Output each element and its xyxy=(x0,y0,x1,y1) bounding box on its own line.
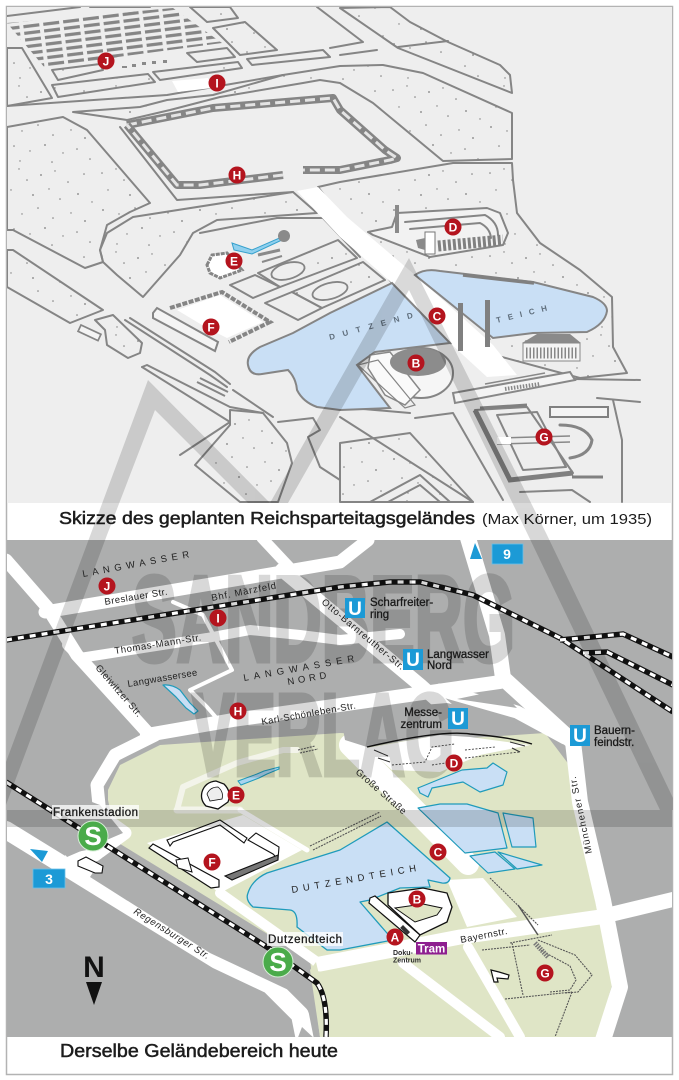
street and area labels: Große Straße xyxy=(353,767,409,817)
S-Bahn Frankenstadion: Frankenstadion xyxy=(53,807,138,819)
March field G xyxy=(475,405,608,480)
markers: map: I xyxy=(216,612,220,626)
markers: map: A xyxy=(391,930,400,944)
street and area labels xyxy=(82,549,595,962)
station: Bauernfeindstr: Bauern- xyxy=(594,725,635,737)
long hall south of avenue xyxy=(453,372,575,403)
Doku-Zentrum label: Zentrum xyxy=(393,958,421,964)
street and area labels: LANGWASSER xyxy=(82,549,194,580)
markers: sketch: D xyxy=(449,220,458,234)
road lines xyxy=(7,7,640,502)
avenue end block xyxy=(447,878,517,927)
G stand xyxy=(491,905,548,982)
street and area labels: Breslauer Str. xyxy=(104,587,169,608)
park area xyxy=(108,733,612,1037)
markers: sketch: I xyxy=(215,76,219,90)
station: Scharfreiter-ring: Scharfreiter- xyxy=(370,597,433,609)
markers: map: F xyxy=(208,856,216,870)
station: Langwasser Nord: U xyxy=(406,650,420,671)
stadium E xyxy=(202,767,279,809)
Building east of lake xyxy=(522,334,581,361)
stippled blocks north xyxy=(7,7,627,502)
markers: map xyxy=(98,578,554,982)
lake label: DUTZEND xyxy=(328,309,422,342)
street and area labels: Karl-Schönleben-Str. xyxy=(261,700,357,728)
street and area labels: Langwassersee xyxy=(127,667,199,690)
grand avenue xyxy=(297,187,517,377)
street and area labels: Bhf. Märzfeld xyxy=(210,581,277,604)
grey strips xyxy=(66,694,517,1037)
north arrow: N xyxy=(83,951,105,984)
station: Bauernfeindstr: feindstr. xyxy=(594,737,634,749)
tram label: Tram xyxy=(418,944,445,956)
S-Bahn Dutzendteich: S xyxy=(269,947,287,977)
markers: map: E xyxy=(232,788,240,802)
motorway badge 9: 9 xyxy=(503,546,511,562)
station: Scharfreiter-ring: U xyxy=(348,599,362,620)
street and area labels: Thomas-Mann-Str. xyxy=(114,632,202,657)
markers: sketch: G xyxy=(539,430,549,444)
station: Messezentrum: Messe- xyxy=(404,707,442,719)
markers: sketch: F xyxy=(207,320,215,334)
Dutzendteich lake xyxy=(248,270,607,410)
caption: sketch xyxy=(59,508,652,528)
caption: sketch: (Max Körner, um 1935) xyxy=(482,512,652,528)
Zeppelin field F xyxy=(78,292,270,396)
street and area labels: NORD xyxy=(287,670,331,688)
markers: map: H xyxy=(234,704,242,718)
white patch at caption road xyxy=(172,78,212,92)
markers: map: C xyxy=(434,846,443,860)
motorway badge 9 xyxy=(470,543,523,564)
north arrow xyxy=(83,951,105,1005)
markers: sketch: B xyxy=(412,356,421,370)
lake label 2: TEICH xyxy=(495,302,555,325)
roads xyxy=(6,538,675,1040)
street and area labels: LANGWASSER xyxy=(243,653,359,684)
Stadium E xyxy=(207,230,290,278)
station: Bauernfeindstr xyxy=(570,725,635,749)
Dutzendteich lake xyxy=(247,822,450,950)
street and area labels: DUTZENDTEICH xyxy=(291,863,421,896)
markers: sketch: E xyxy=(230,254,238,268)
small plots xyxy=(230,240,385,320)
markers: sketch xyxy=(98,52,552,446)
Congress hall D xyxy=(368,205,508,257)
caption: sketch: Skizze des geplanten Reichsparteitagsgeländes xyxy=(59,508,475,528)
F field white block xyxy=(147,815,302,893)
markers: map: G xyxy=(540,966,550,980)
Arena B xyxy=(358,348,453,408)
markers: sketch: C xyxy=(433,310,442,324)
S-Bahn Dutzendteich xyxy=(263,932,343,977)
station: Langwasser Nord: Langwasser xyxy=(427,649,489,661)
Zeppelin tribunes F xyxy=(149,820,279,888)
S-Bahn Dutzendteich: Dutzendteich xyxy=(268,934,342,946)
horseshoe B and Doku-Zentrum xyxy=(369,888,452,942)
ponds xyxy=(163,685,542,873)
railway xyxy=(6,582,673,1037)
Doku-Zentrum label xyxy=(393,950,421,964)
station: Scharfreiter-ring: ring xyxy=(370,609,389,621)
street and area labels: Otto-Barnreuther-Str. xyxy=(319,597,407,673)
station: Langwasser Nord: Nord xyxy=(427,660,452,672)
S-Bahn Frankenstadion: S xyxy=(84,821,102,851)
Doku-Zentrum label: Doku- xyxy=(393,950,414,957)
caption: today: Derselbe Geländebereich heute xyxy=(60,1041,338,1061)
S-Bahn Frankenstadion xyxy=(52,805,139,851)
motorway badge 3: 3 xyxy=(45,871,53,887)
S station small building xyxy=(78,857,103,873)
station: Messezentrum xyxy=(400,707,468,731)
station: Messezentrum: zentrum xyxy=(400,719,442,731)
street and area labels: Gleiwitzer Str. xyxy=(93,663,144,720)
markers: map: J xyxy=(104,580,110,594)
street and area labels: Regensburger Str. xyxy=(131,906,212,962)
panel: today's map xyxy=(6,538,675,1040)
obelisks xyxy=(458,300,490,351)
motorway badge 3 xyxy=(30,849,65,888)
dotted paths xyxy=(298,746,592,1037)
markers: sketch: H xyxy=(233,168,241,182)
street and area labels: Bayernstr. xyxy=(459,926,509,946)
camp grid J xyxy=(7,7,222,68)
J bars small marks xyxy=(122,60,167,68)
arena H xyxy=(127,98,397,185)
markers: sketch: J xyxy=(103,54,109,68)
station: Scharfreiter-ring xyxy=(345,597,433,621)
watermark triangle and lettering xyxy=(6,258,673,827)
markers: map: D xyxy=(450,756,459,770)
Congress hall site D xyxy=(367,733,532,772)
watermark triangle and lettering: VERLAG xyxy=(192,670,454,800)
street and area labels: Münchener Str. xyxy=(568,775,595,855)
panel: planned site sketch xyxy=(7,7,672,503)
station: Langwasser Nord xyxy=(403,649,489,672)
station: Messezentrum: U xyxy=(451,709,465,730)
markers: map: B xyxy=(413,892,422,906)
station: Bauernfeindstr: U xyxy=(573,726,587,747)
